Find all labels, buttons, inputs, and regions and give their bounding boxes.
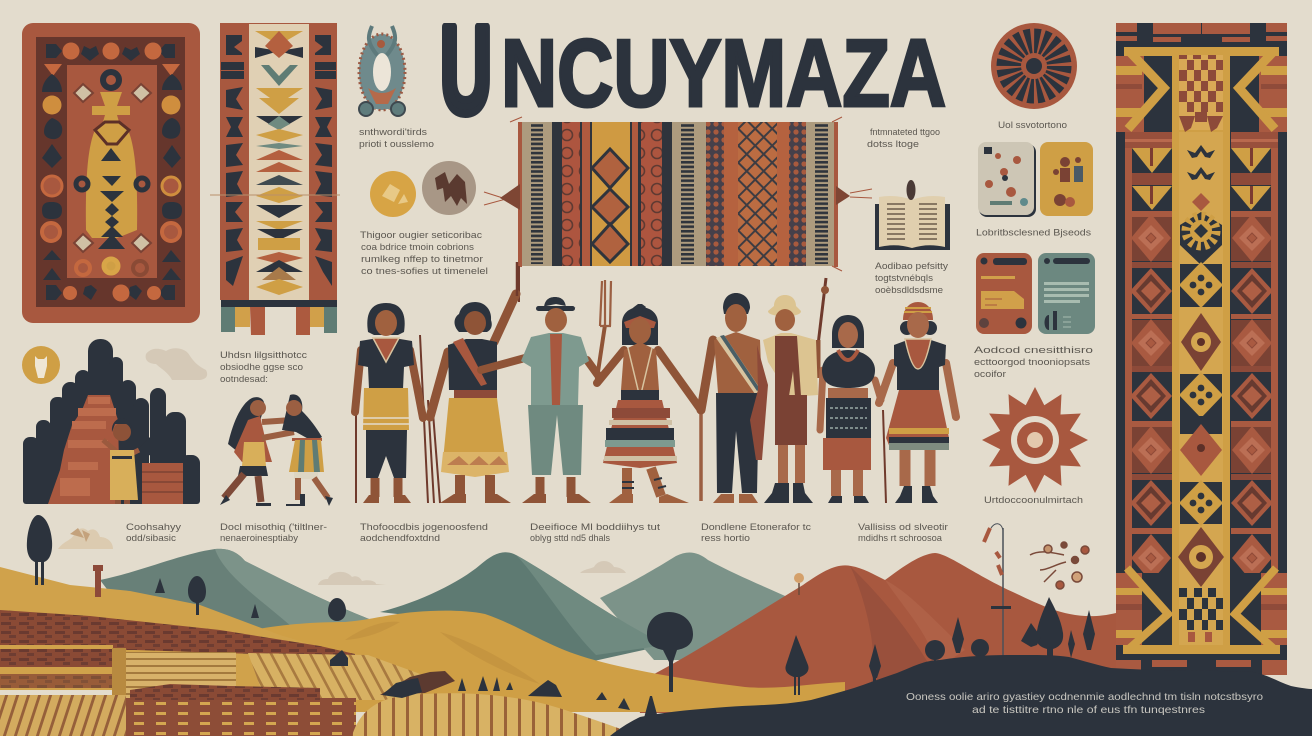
landscape: mountains and farmland: [0, 515, 1116, 736]
title: [440, 2, 946, 140]
text block: info card caption: ocoifor: [974, 369, 1006, 380]
clouds: [318, 561, 626, 585]
arrow: toward book: [850, 189, 872, 198]
people group: eight figures in traditional dress: [355, 262, 956, 503]
banner fringe: [221, 307, 337, 335]
icons: gold medallion and figures medallion: [370, 161, 476, 217]
tapestry checker top: [1179, 55, 1223, 132]
field trees: [27, 515, 658, 718]
text block: info card caption: Aodcod cnesitthisro: [974, 345, 1093, 356]
figure 4: woman with patterned skirt: [597, 304, 701, 503]
tapestry small motifs: [1187, 145, 1215, 180]
title: NCUYMAZA: [501, 20, 946, 127]
text: cards caption: Lobritbsclesned Bjseods: [976, 228, 1091, 238]
terracotta mountains: [633, 553, 1116, 713]
figure 7: woman with poncho: [820, 315, 886, 503]
illustration: stone ruins and girl: [23, 339, 200, 504]
illustration: two women greeting: [220, 394, 333, 506]
tapestry checker bottom: [1179, 588, 1223, 642]
text block: book caption: Aodibao pefsitty: [875, 261, 948, 272]
captions row: ress hortio: [701, 533, 750, 544]
text: disc caption: Uol ssvotortono: [998, 120, 1067, 131]
captions row: Docl misothiq ('tiltlner-: [220, 522, 327, 533]
text: sun caption: Urtdoccoonulmirtach: [984, 495, 1083, 506]
rug central figure: [74, 72, 151, 275]
captions row: Deeifioce Ml boddiihys tut: [530, 522, 660, 533]
title: U: [440, 2, 492, 140]
icon: rayed disc: [991, 23, 1077, 109]
figure 6: man with straw hat and vest: [763, 278, 829, 503]
trees on ridge: [785, 597, 1095, 695]
tapestry central diamonds: [1178, 262, 1224, 587]
text block: history description: rumlkeg nffep to tinetmor: [361, 254, 483, 265]
captions row: Vallisiss od slveotir: [858, 522, 948, 533]
text block: figure caption: prioti t ousslemo: [359, 139, 434, 150]
golden hill folds: [345, 622, 540, 684]
tapestry star medallion: [1180, 193, 1222, 265]
captions row: Thofoocdbis jogenoosfend: [360, 522, 488, 533]
figure 8: woman with headwrap and beads: [879, 302, 956, 503]
icon: beaded ceremonial figure: [359, 26, 405, 116]
tree: large canopy: [647, 612, 693, 692]
captions row: Dondlene Etonerafor tc: [701, 522, 811, 533]
text block: textile caption: fntmnateted ttgoo: [870, 127, 940, 138]
illustration: faded cloud sketch: [58, 528, 113, 549]
text block: history description: Thigoor ougier seticoribac: [360, 230, 482, 241]
banner central triangles: [255, 31, 303, 295]
panel: tall woven tapestry: [1116, 23, 1287, 675]
panel: left patterned rug: [22, 23, 200, 323]
captions row: mdidhs rt schroosoa: [858, 533, 943, 544]
text block: ruins description: obsiodhe ggse sco: [220, 362, 303, 373]
text block: closing statement: Ooness oolie ariro gyastiey ocdnenmie aodlechnd tm tisln notcstbsyro: [906, 691, 1263, 703]
panel: vertical woven banner: [210, 23, 340, 335]
captions row: oblyg sttd nd5 dhals: [530, 533, 610, 544]
text block: info card caption: ecttoorgod tnooniopsats: [974, 357, 1090, 368]
golden left hill: [0, 567, 330, 690]
icon: open book: [875, 180, 950, 250]
text block: closing statement: ad te tisttitre rtno nle of eus tfn tunqestnres: [972, 704, 1205, 716]
captions row: Coohsahyy: [126, 522, 181, 533]
sage mountains: [100, 549, 794, 665]
illustration: floral sprig: [1030, 542, 1089, 589]
captions row: [126, 522, 948, 544]
figure 3: man with hat and sage shirt: [481, 280, 611, 503]
text block: ruins description: ootndesad:: [220, 374, 268, 385]
captions row: aodchendfoxtdnd: [360, 533, 440, 544]
text block: figure caption: snthwordi'tirds: [359, 127, 427, 138]
textile diamonds: [592, 149, 628, 262]
text block: book caption: togtstvnébqls: [875, 273, 933, 284]
signposts and staffs: [794, 524, 1011, 658]
panel: information cards: [976, 253, 1095, 334]
icon: gold round emblem: [22, 346, 60, 384]
small tower on hill: [93, 565, 103, 597]
text block: textile caption: dotss ltoge: [867, 139, 919, 150]
text block: history description: coa bdrice tmoin cobrions: [361, 242, 474, 253]
figure 1: woman with staffs: [355, 303, 428, 503]
icon: sun emblem: [982, 387, 1088, 493]
text block: history description: co tnes-sofies ut timenelel: [361, 266, 488, 277]
panel: illustrated cards: [978, 142, 1093, 217]
captions row: nenaeroinesptiaby: [220, 533, 298, 544]
arrow: toward central textile: [484, 192, 506, 205]
rug side motifs: [42, 64, 182, 280]
figure 5: man with sash and staff: [701, 293, 768, 503]
captions row: odd/sibasic: [126, 533, 176, 544]
panel: central woven textile: [500, 117, 850, 302]
icon: cloud: [146, 348, 207, 380]
dark foreground hill: [610, 655, 1312, 736]
text block: ruins description: Uhdsn lilgsitthotcc: [220, 350, 307, 361]
terraced fields: [0, 610, 642, 736]
golden hill: [215, 611, 845, 712]
figure 2: woman raising arm: [428, 262, 517, 503]
text block: book caption: ooèbsdldsdsme: [875, 285, 943, 296]
